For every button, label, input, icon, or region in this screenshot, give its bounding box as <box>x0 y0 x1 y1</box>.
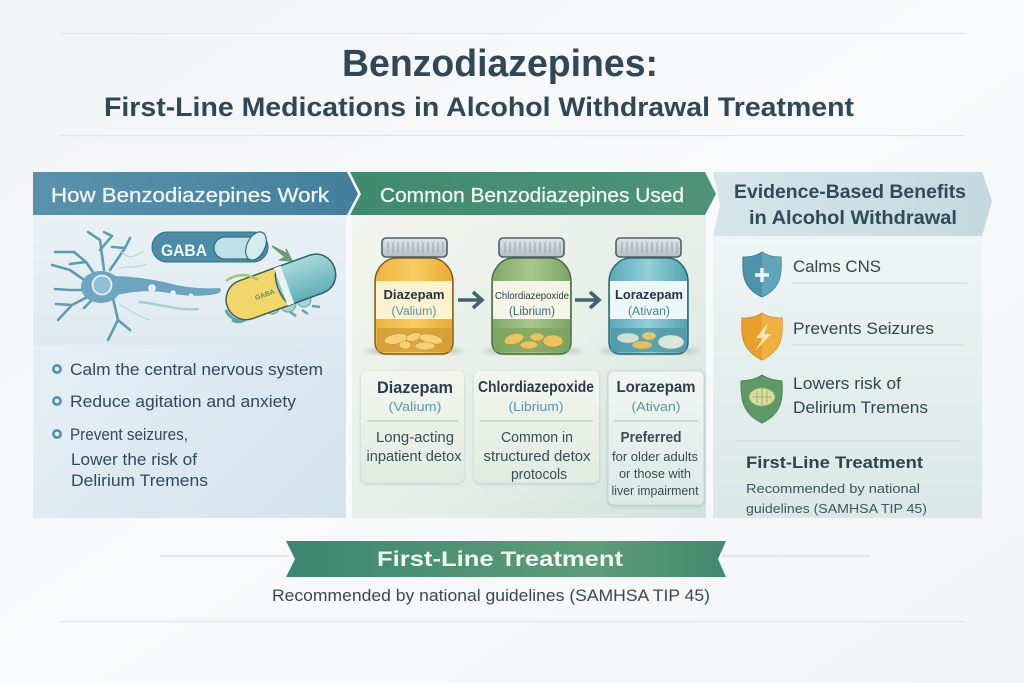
icon: diazepam bottle <box>364 238 464 355</box>
icon: diazepam bottle: (Valium) <box>392 306 437 318</box>
arrow <box>458 292 482 308</box>
title: Benzodiazepines: <box>342 43 658 85</box>
heading: how benzodiazepines work <box>33 172 358 215</box>
icon: GABA capsule: GABA <box>161 241 207 260</box>
list: mechanism <box>53 361 323 490</box>
list: mechanism: Delirium Tremens <box>71 472 208 490</box>
icon: shield with plus <box>743 252 781 297</box>
text: lowers risk: Lowers risk of <box>793 375 901 393</box>
card: chlordiazepoxide: structured detox <box>484 449 591 465</box>
text: guideline source: Recommended by national guidelines (SAMHSA TIP 45) <box>272 587 710 605</box>
panel: common benzodiazepines used <box>350 172 716 518</box>
card: chlordiazepoxide: (Librium) <box>508 399 564 414</box>
heading: common benzodiazepines used: Common Benzodiazepines Used <box>380 185 684 207</box>
card: diazepam: inpatient detox <box>366 449 462 465</box>
icon: GABA capsule <box>152 229 270 263</box>
icon: small green arrow <box>272 246 292 261</box>
card: chlordiazepoxide: Chlordiazepoxide <box>478 379 594 396</box>
text: lowers risk: Delirium Tremens <box>793 399 928 417</box>
card: lorazepam: liver impairment <box>612 484 699 498</box>
ribbon: first-line treatment <box>286 541 726 577</box>
arrow <box>575 292 599 308</box>
text: first-line treatment note: guidelines (SAMHSA TIP 45) <box>746 501 927 516</box>
icon: lorazepam bottle <box>599 238 699 355</box>
card: lorazepam: (Ativan) <box>632 399 680 414</box>
ribbon: first-line treatment: First-Line Treatment <box>377 547 623 571</box>
card: chlordiazepoxide: protocols <box>511 467 567 483</box>
text: prevents seizures: Prevents Seizures <box>793 320 934 338</box>
card: chlordiazepoxide: Common in <box>501 430 573 446</box>
icon: lorazepam bottle: (Ativan) <box>628 306 670 318</box>
icon: chlordiazepoxide bottle: Chlordiazepoxide <box>495 290 569 302</box>
heading: evidence-based benefits: Evidence-Based Benefits <box>734 181 966 203</box>
text: lowers risk <box>793 375 928 417</box>
card: lorazepam: Preferred <box>620 430 682 446</box>
card: diazepam: Diazepam <box>377 379 453 397</box>
card: diazepam: Long-acting <box>376 430 454 446</box>
text: first-line treatment note <box>746 454 927 516</box>
icon: shield with lightning <box>742 313 782 360</box>
text: calms CNS: Calms CNS <box>793 258 881 276</box>
title: First-Line Medications in Alcohol Withdrawal Treatment <box>104 92 854 122</box>
panel: evidence-based benefits <box>713 172 992 518</box>
card: lorazepam <box>608 371 704 505</box>
icon: chlordiazepoxide bottle: (Librium) <box>509 306 555 318</box>
card: lorazepam: Lorazepam <box>616 379 696 396</box>
list: mechanism: Reduce agitation and anxiety <box>70 393 297 411</box>
title <box>104 43 854 122</box>
list: mechanism: Lower the risk of <box>71 451 197 469</box>
card: lorazepam: for older adults <box>612 450 698 464</box>
heading: how benzodiazepines work: How Benzodiazepines Work <box>51 185 330 207</box>
heading: evidence-based benefits <box>713 172 992 236</box>
heading: evidence-based benefits: in Alcohol Withdrawal <box>749 207 957 229</box>
heading: common benzodiazepines used <box>350 172 716 215</box>
list: mechanism: Prevent seizures, <box>70 426 188 444</box>
card: chlordiazepoxide <box>474 371 599 483</box>
card: diazepam <box>361 371 464 483</box>
list: mechanism: Calm the central nervous system <box>70 361 323 379</box>
text: first-line treatment note: Recommended by national <box>746 481 920 496</box>
card: diazepam: (Valium) <box>388 399 442 414</box>
card: lorazepam: or those with <box>619 467 691 481</box>
icon: tilted capsule <box>220 249 341 325</box>
icon: neuron <box>52 232 221 340</box>
icon: lorazepam bottle: Lorazepam <box>615 287 683 302</box>
text: first-line treatment note: First-Line Treatment <box>746 454 924 472</box>
panel: how benzodiazepines work <box>33 172 358 518</box>
icon: shield with brain <box>741 375 782 423</box>
icon: chlordiazepoxide bottle <box>482 238 582 355</box>
icon: diazepam bottle: Diazepam <box>384 287 444 302</box>
icon: tilted capsule: GABA <box>254 289 276 302</box>
